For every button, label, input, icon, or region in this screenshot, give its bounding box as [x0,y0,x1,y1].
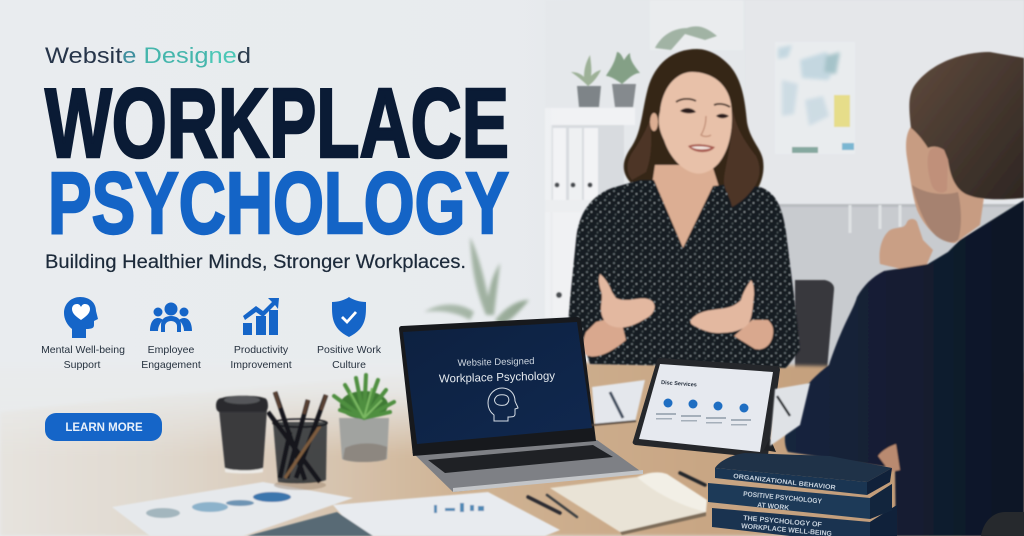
ear [928,147,948,193]
label: Mental Well-being [41,344,125,356]
whiteboard [745,0,1024,377]
laptop screen text: Website Designed [457,356,535,369]
tablet [633,358,780,458]
title: PSYCHOLOGY: PSYCHOLOGY [48,155,509,252]
left arm [583,316,626,357]
hair [909,52,1024,199]
lid [399,317,596,456]
tablet icons [664,398,748,412]
feature: productivity improvement [230,298,292,371]
label: Positive Work [317,344,382,356]
blouse [568,180,800,368]
hair back [624,49,763,207]
report sheet left [112,482,353,536]
shelf plants [571,26,717,107]
woman [568,49,800,368]
desk plant [334,375,394,462]
wavy hair lock [724,110,759,207]
neck and chest [652,165,720,250]
laptop base [412,440,643,492]
feature: mental well-being [41,297,125,371]
chair behind woman [795,280,834,370]
nose and mouth [701,116,711,136]
tablet title: Disc Services [661,380,697,388]
face [659,72,732,174]
table [0,362,1024,536]
notebook [550,472,707,535]
bottom book: THE PSYCHOLOGY OF [743,515,823,529]
laptop: Workplace Psychology [439,370,555,386]
man [785,52,1024,536]
left hand [599,274,655,328]
right arm [734,320,773,349]
blurred floor plant [424,237,529,326]
chair corner [981,512,1024,536]
subtitle: Building Healthier Minds, Stronger Workplaces. [45,252,466,273]
brows [676,99,730,107]
icon: shield with check [332,297,366,337]
laptop [399,317,643,492]
middle book: AT WORK [757,502,789,512]
papers on table [112,482,560,536]
feature: positive work culture [317,297,382,371]
label: Productivity [234,344,289,356]
feature: employee engagement: Engagement [141,359,201,371]
papers behind tablet [592,380,810,446]
title: WORKPLACE: WORKPLACE [45,68,509,178]
top book: ORGANIZATIONAL BEHAVIOR [733,473,836,492]
pencil holder [268,392,327,490]
shelf [545,0,745,370]
pens [528,473,705,517]
feature: productivity improvement: Improvement [230,359,292,371]
eyes [680,108,729,118]
book stack [708,453,897,536]
feature: positive work culture: Culture [332,359,366,371]
middle book: POSITIVE PSYCHOLOGY [743,491,822,506]
top book [715,453,892,495]
button: learn more [45,413,162,441]
laptop brain head icon [488,388,518,421]
coffee cup [216,396,268,474]
raised hand [879,219,933,270]
left hair lock [628,120,651,180]
bottom book [712,505,897,536]
face and neck [906,110,985,243]
right hand [690,280,754,333]
keyboard [428,445,613,473]
photo on sheet [247,512,373,536]
ear [650,113,658,131]
feature: mental well-being: Support [64,359,100,371]
left fade over background [0,0,570,380]
button: learn more: LEARN MORE [65,422,143,434]
icon: rising bar chart [243,298,279,335]
label: Employee [148,344,194,356]
beard shadow [912,185,961,242]
tablet stand [764,438,776,452]
middle book [708,483,892,519]
feature: employee engagement [141,302,201,371]
report sheet right [333,492,560,536]
eyebrow: Website Designed: Websit e Desig ned [45,43,251,68]
icon: head with heart [64,297,98,338]
hand on table [878,444,900,472]
icon: people [150,302,192,332]
jacket [785,200,1024,536]
